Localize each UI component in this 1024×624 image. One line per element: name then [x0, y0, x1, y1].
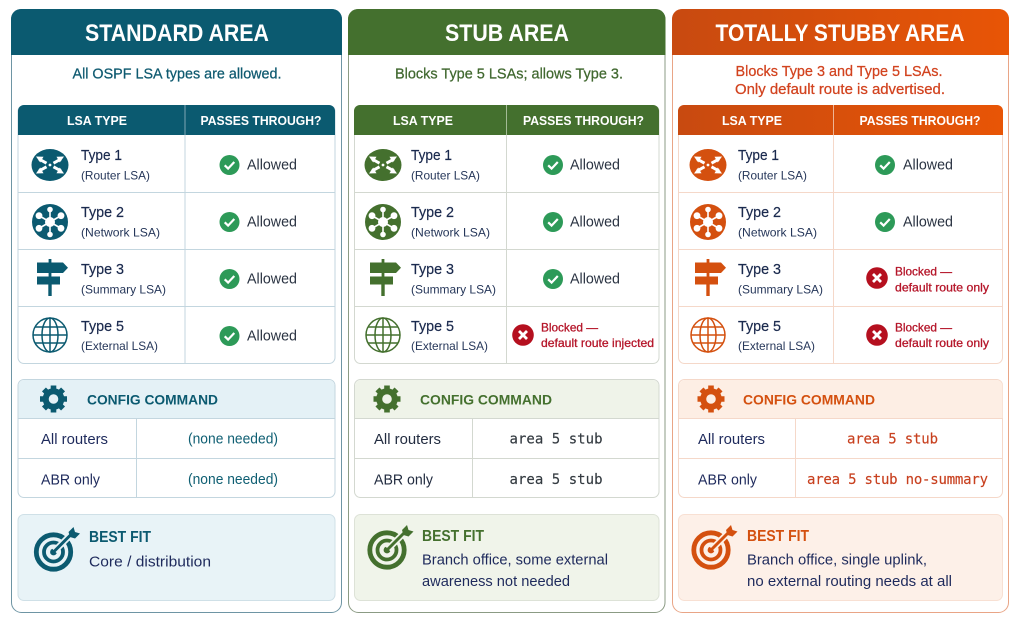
text: standard area summary: All OSPF LSA types are allowed.: [72, 66, 282, 82]
icon: gear: [374, 386, 400, 412]
panel: best fit, standard area: [18, 514, 335, 600]
row: type 5: [691, 318, 989, 353]
config heading: CONFIG COMMAND: [87, 392, 218, 408]
heading: totally stubby area: TOTALLY STUBBY AREA: [716, 20, 964, 47]
table: LSA types, stub area: [354, 105, 659, 364]
row: type 1: Allowed: [247, 158, 297, 174]
row: all routers: area 5 stub: [847, 432, 938, 448]
row: type 5: [33, 318, 297, 353]
row: type 2: (Network LSA): [81, 226, 160, 240]
row: all routers: [41, 431, 278, 448]
row: ABR only: ABR only: [41, 472, 100, 488]
row: type 2: Type 2: [81, 205, 124, 221]
row: type 5: Type 5: [738, 319, 781, 335]
row: type 1: (Router LSA): [81, 168, 150, 182]
row: type 3: [370, 259, 620, 296]
row: type 2: Allowed: [903, 214, 953, 230]
panel: config command, standard area: [18, 380, 335, 498]
row: type 2: [365, 204, 620, 240]
row: type 2: Type 2: [411, 205, 454, 221]
icon: target: [694, 525, 738, 567]
row: ABR only: [374, 472, 602, 488]
best fit text: Branch office, single uplink,: [747, 552, 927, 568]
text: totally stubby summary: [735, 64, 945, 98]
row: all routers: area 5 stub: [510, 432, 602, 448]
row: type 5: Blocked —: [895, 320, 952, 334]
row: ABR only: area 5 stub: [510, 472, 602, 488]
row: type 5: Type 5: [411, 319, 454, 335]
row: type 5: Type 5: [81, 319, 124, 335]
row: type 3: (Summary LSA): [411, 282, 496, 296]
table: LSA types, totally stubby area: PASSES THROUGH?: [860, 113, 981, 128]
table: LSA types, totally stubby area: LSA TYPE: [722, 113, 782, 128]
row: type 1: Allowed: [570, 158, 620, 174]
row: type 2: [32, 204, 297, 240]
config heading: CONFIG COMMAND: [420, 392, 552, 408]
row: type 1: Allowed: [903, 158, 953, 174]
panel: standard area: [11, 9, 342, 612]
row: ABR only: ABR only: [698, 472, 757, 488]
text: totally stubby summary: Only default route is advertised.: [735, 82, 945, 98]
best fit text: Core / distribution: [89, 554, 211, 570]
table: LSA types, stub area: PASSES THROUGH?: [523, 113, 644, 128]
icon: gear: [40, 386, 67, 412]
row: type 5: default route injected: [541, 336, 654, 350]
row: type 3: [37, 259, 297, 296]
row: type 3: Allowed: [247, 272, 297, 288]
row: type 1: [690, 148, 953, 182]
row: type 5: (External LSA): [738, 339, 815, 353]
table: LSA types, stub area: LSA TYPE: [393, 113, 453, 128]
row: type 3: (Summary LSA): [81, 282, 166, 296]
table: LSA types, standard area: [18, 105, 335, 364]
best fit text: no external routing needs at all: [747, 573, 952, 590]
row: type 3: Type 3: [411, 262, 454, 278]
text: totally stubby summary: Blocks Type 3 and Type 5 LSAs.: [736, 64, 942, 80]
row: all routers: (none needed): [188, 432, 278, 448]
row: type 2: (Network LSA): [411, 226, 490, 240]
row: type 5: (External LSA): [81, 339, 158, 353]
row: type 3: [695, 259, 989, 296]
row: all routers: All routers: [698, 431, 765, 448]
row: ABR only: [41, 472, 278, 488]
icon: target: [370, 525, 414, 567]
table: LSA types, totally stubby area: [678, 105, 1003, 364]
row: all routers: [374, 431, 602, 448]
row: type 3: Blocked —: [895, 264, 952, 278]
row: type 3: (Summary LSA): [738, 282, 823, 296]
row: all routers: [698, 431, 938, 448]
config heading: CONFIG COMMAND: [743, 392, 875, 408]
row: type 5: Blocked —: [541, 320, 598, 334]
panel: best fit, stub area: [354, 514, 659, 600]
row: ABR only: area 5 stub no-summary: [807, 472, 988, 488]
best fit text: awareness not needed: [422, 573, 570, 590]
heading: standard area: [11, 9, 342, 55]
row: type 1: Type 1: [738, 148, 779, 164]
best fit text: [747, 552, 952, 590]
heading: stub area: [348, 9, 666, 55]
table: LSA types, standard area: PASSES THROUGH?: [200, 113, 322, 128]
row: type 5: Allowed: [247, 328, 297, 344]
heading: standard area: STANDARD AREA: [85, 20, 269, 47]
row: type 2: Type 2: [738, 205, 781, 221]
row: type 3: Type 3: [81, 262, 124, 278]
text: stub area summary: Blocks Type 5 LSAs; allows Type 3.: [395, 66, 623, 82]
best fit heading: BEST FIT: [422, 528, 484, 545]
row: type 1: Type 1: [411, 148, 452, 164]
row: type 2: Allowed: [570, 214, 620, 230]
best fit heading: BEST FIT: [89, 529, 151, 546]
best fit text: [422, 552, 608, 590]
row: type 5: [366, 318, 654, 353]
row: all routers: All routers: [41, 431, 108, 448]
table: LSA types, standard area: LSA TYPE: [67, 113, 127, 128]
row: type 5: (External LSA): [411, 339, 488, 353]
panel: stub area: [348, 9, 666, 612]
icon: gear: [698, 386, 724, 412]
row: type 3: Type 3: [738, 262, 781, 278]
row: type 2: (Network LSA): [738, 226, 817, 240]
row: type 2: [690, 204, 953, 240]
row: ABR only: [698, 472, 988, 488]
row: type 1: Type 1: [81, 148, 122, 164]
row: ABR only: ABR only: [374, 472, 433, 488]
row: type 2: Allowed: [247, 214, 297, 230]
best fit text: Branch office, some external: [422, 552, 608, 568]
row: all routers: All routers: [374, 431, 441, 448]
panel: best fit, totally stubby area: [678, 514, 1002, 600]
best fit heading: BEST FIT: [747, 528, 809, 545]
heading: stub area: STUB AREA: [445, 20, 569, 47]
panel: config command, totally stubby area: [678, 380, 1003, 498]
row: ABR only: (none needed): [188, 472, 278, 488]
row: type 1: [364, 148, 620, 182]
row: type 5: default route only: [895, 336, 989, 350]
row: type 1: (Router LSA): [411, 168, 480, 182]
panel: totally stubby area: [672, 9, 1009, 612]
row: type 3: Allowed: [570, 272, 620, 288]
row: type 3: default route only: [895, 280, 989, 294]
row: type 1: [32, 148, 297, 182]
row: type 1: (Router LSA): [738, 168, 807, 182]
panel: config command, stub area: [354, 380, 659, 498]
icon: target: [36, 527, 80, 569]
heading: totally stubby area: [672, 9, 1009, 55]
